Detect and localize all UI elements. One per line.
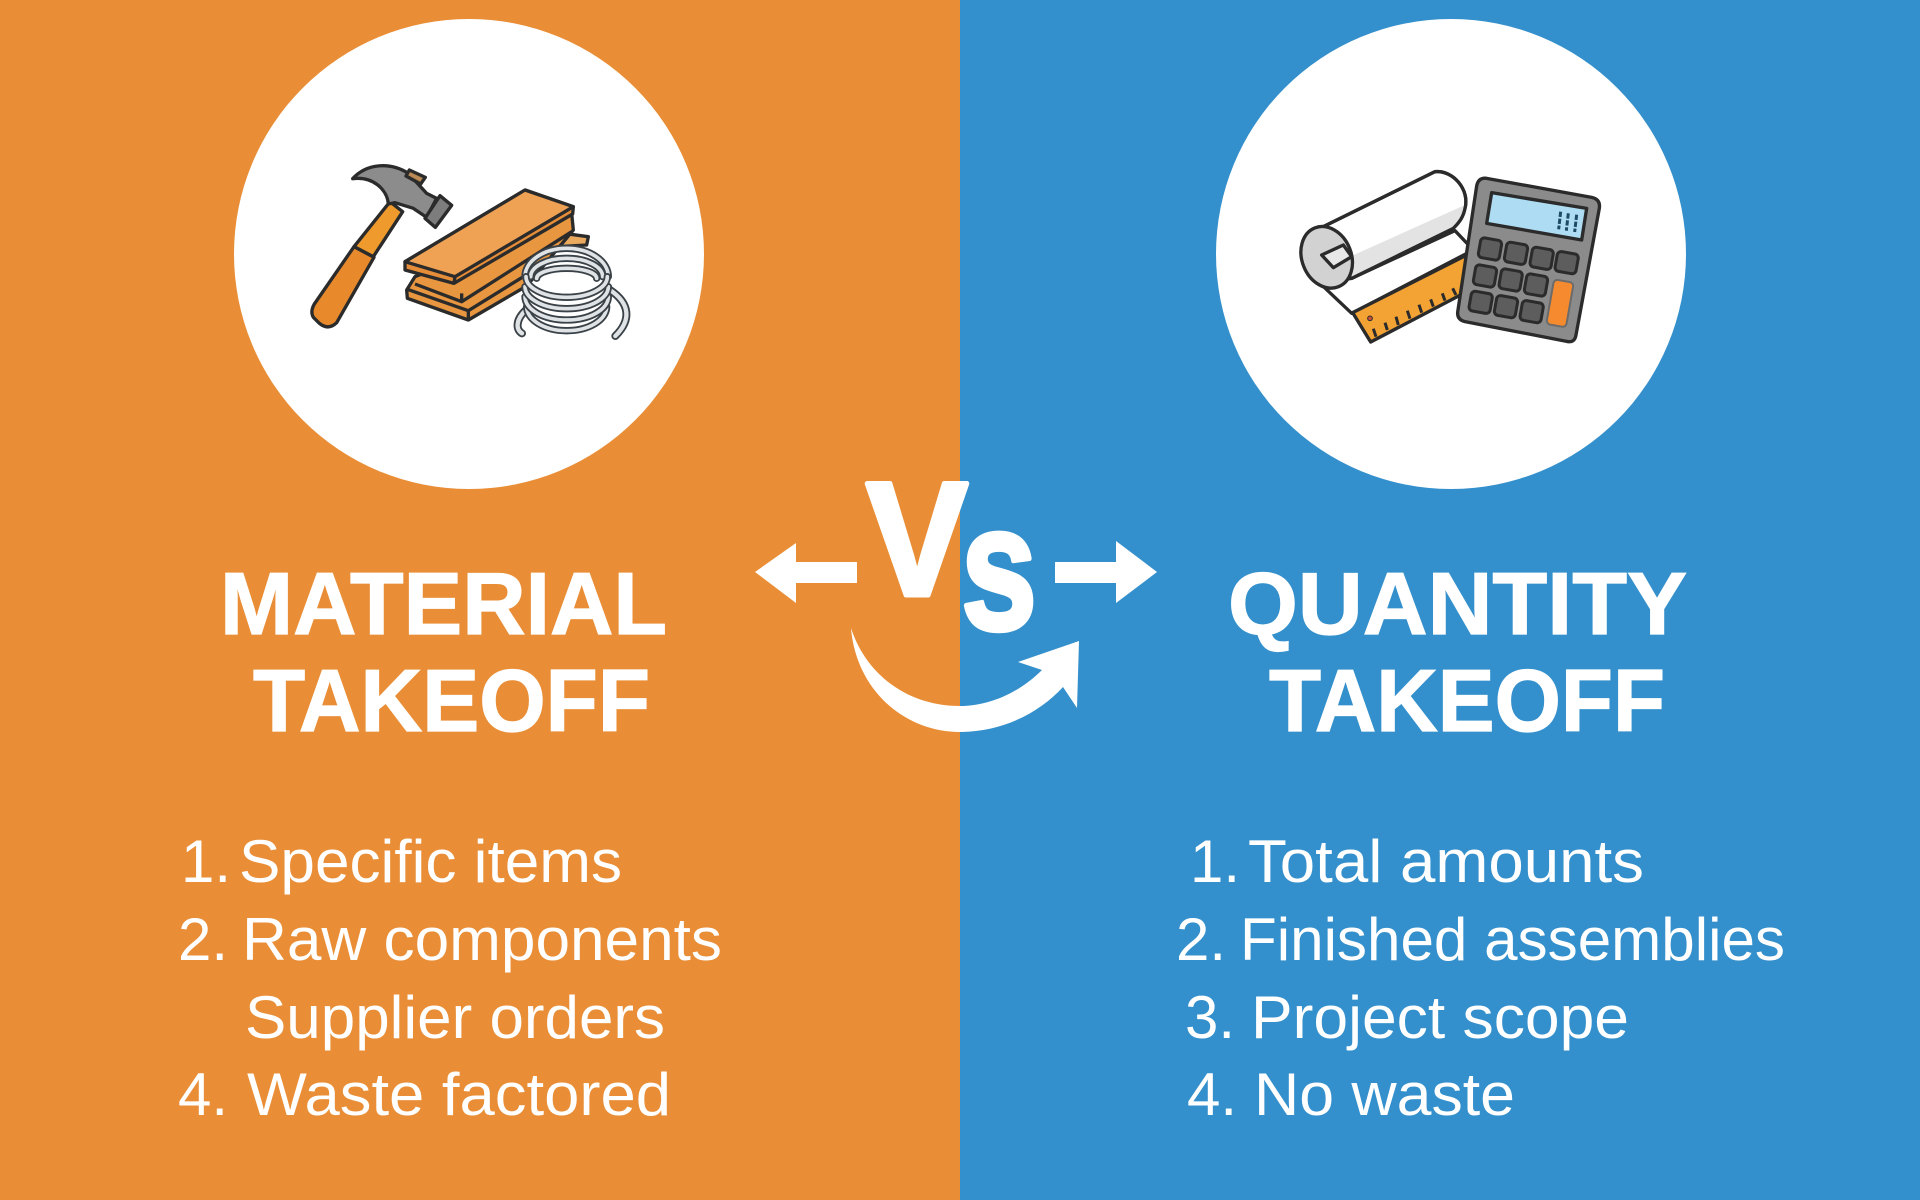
vs badge with arrows [755, 449, 1157, 732]
panel: material takeoff [0, 0, 960, 1200]
list: quantity takeoff points: Total amounts [1248, 828, 1644, 895]
list: quantity takeoff points: Finished assemblies [1240, 906, 1785, 973]
heading: material takeoff: MATERIAL [220, 554, 667, 653]
panel background: blue [960, 0, 1920, 1200]
heading: material takeoff [220, 554, 667, 750]
panel: quantity takeoff [960, 0, 1920, 1200]
icon: lumber stack [405, 190, 588, 320]
list: material takeoff points: Supplier orders [245, 984, 665, 1051]
icon: paper roll and ruler [1292, 172, 1473, 342]
list: material takeoff points: Raw components [242, 906, 722, 973]
arrow: right [1055, 541, 1157, 603]
list: quantity takeoff points [1176, 828, 1785, 1128]
list: quantity takeoff points: 4. [1187, 1061, 1237, 1128]
list: quantity takeoff points: 2. [1176, 906, 1226, 973]
panel background: orange [0, 0, 960, 1200]
icon circle: plans and calculation [1216, 19, 1686, 489]
list: quantity takeoff points: 3. [1185, 984, 1235, 1051]
heading: material takeoff: TAKEOFF [253, 651, 650, 750]
list: quantity takeoff points: No waste [1254, 1061, 1515, 1128]
list: material takeoff points [178, 828, 722, 1128]
icon: calculator [1458, 178, 1600, 342]
list: material takeoff points: 1. [181, 828, 231, 895]
list: material takeoff points: 2. [178, 906, 228, 973]
list: material takeoff points: Specific items [239, 828, 622, 895]
heading: quantity takeoff: QUANTITY [1228, 554, 1687, 653]
icon: wire coil [518, 248, 626, 336]
list: quantity takeoff points: Project scope [1251, 984, 1629, 1051]
icon: hammer [312, 166, 452, 327]
heading: quantity takeoff [1228, 554, 1687, 750]
list: quantity takeoff points: 1. [1190, 828, 1240, 895]
list: material takeoff points: Waste factored [247, 1061, 671, 1128]
heading: quantity takeoff: TAKEOFF [1269, 651, 1665, 750]
vs label: V [866, 449, 968, 630]
arrow: curved exchange [851, 628, 1079, 732]
icon circle: materials [234, 19, 704, 489]
vs label [866, 449, 1037, 667]
list: material takeoff points: 4. [178, 1061, 228, 1128]
arrow: left [755, 543, 857, 603]
vs label: s [961, 468, 1037, 667]
